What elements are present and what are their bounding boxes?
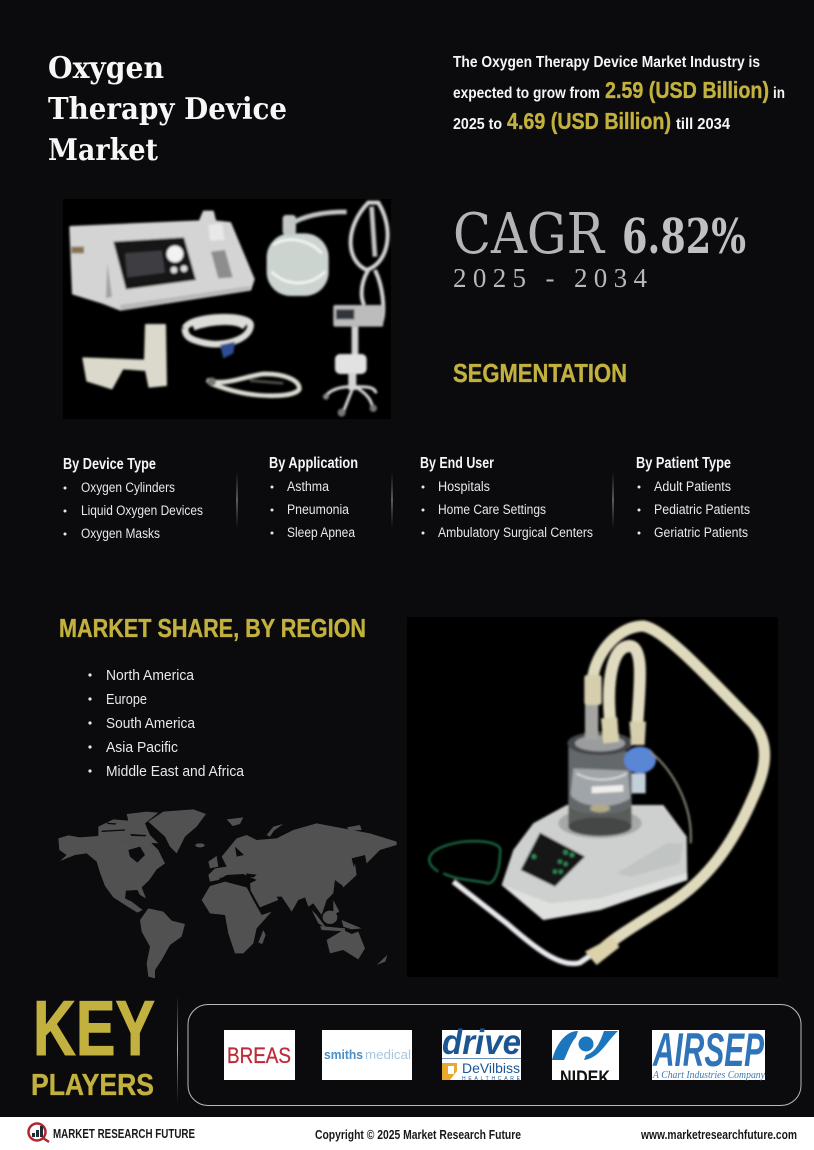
connectors — [585, 703, 598, 740]
logo: AirSep: A Chart Industries Company — [652, 1070, 765, 1081]
title — [48, 51, 287, 168]
CAGR figure: 6.82% — [622, 209, 746, 265]
world map — [58, 809, 397, 978]
product photo: humidifier — [407, 617, 778, 977]
segment: by patient type: By Patient Type — [636, 455, 731, 472]
region list: North America — [106, 667, 195, 684]
logo: Nidek — [552, 1030, 619, 1089]
footer — [0, 1117, 814, 1150]
segment: by end user: By End User — [420, 455, 494, 472]
humidifier chamber — [267, 233, 329, 296]
logo: Drive DeVilbiss: drive — [442, 1023, 521, 1062]
key players heading: PLAYERS — [31, 1067, 154, 1102]
logo: Smiths Medical: medical — [365, 1048, 411, 1062]
logo: Drive DeVilbiss — [442, 1023, 521, 1082]
segment: by device type: Liquid Oxygen Devices — [81, 503, 203, 518]
segment: by application: Asthma — [287, 479, 329, 494]
breathing circuit — [207, 374, 299, 396]
nebulizer — [624, 747, 656, 773]
logo: Drive DeVilbiss: HEALTHCARE — [462, 1076, 521, 1082]
segment: by patient type: Adult Patients — [654, 479, 731, 494]
icon: magnifier logo — [28, 1124, 49, 1142]
segment: by patient type: Pediatric Patients — [654, 502, 750, 517]
title: Oxygen — [48, 51, 164, 86]
key players panel — [188, 1004, 801, 1106]
market forecast text: 2025 to — [453, 116, 502, 133]
CAGR figure — [453, 202, 746, 293]
segment: by device type — [63, 456, 203, 541]
market share heading: MARKET SHARE, BY REGION — [59, 613, 366, 643]
segment: by end user: Ambulatory Surgical Centers — [438, 525, 593, 540]
segment: by end user: Home Care Settings — [438, 502, 546, 517]
segment: by device type: Oxygen Cylinders — [81, 480, 175, 495]
dark inland seas — [102, 823, 257, 885]
segment: by end user — [420, 455, 593, 540]
region list: Europe — [106, 691, 147, 708]
region list: Middle East and Africa — [106, 763, 245, 780]
market forecast text: in — [773, 85, 785, 102]
market forecast text: till 2034 — [676, 116, 730, 133]
key players heading — [31, 984, 155, 1102]
title: Market — [48, 133, 158, 168]
market forecast text: The Oxygen Therapy Device Market Industry is — [453, 54, 760, 71]
logo: Smiths Medical — [322, 1030, 412, 1080]
segmentation heading: SEGMENTATION — [453, 358, 627, 388]
segment: by patient type: Geriatric Patients — [654, 525, 748, 540]
T connector — [83, 325, 166, 388]
logo: Breas: BREAS — [227, 1043, 291, 1068]
main device body — [71, 212, 253, 309]
region list — [88, 667, 245, 780]
CAGR figure: CAGR — [453, 202, 606, 267]
logo: Drive DeVilbiss: DeVilbiss — [462, 1060, 520, 1076]
segment: by patient type — [636, 455, 750, 540]
logo: Nidek: NIDEK — [560, 1068, 610, 1089]
footer: MARKET RESEARCH FUTURE — [53, 1127, 195, 1141]
cannula — [429, 841, 500, 883]
logo: AirSep — [652, 1023, 765, 1081]
market forecast text: 4.69 (USD Billion) — [507, 108, 671, 134]
segment: by application — [269, 455, 358, 540]
segment: by application: Pneumonia — [287, 502, 349, 517]
market forecast text: expected to grow from — [453, 85, 600, 102]
title: Therapy Device — [48, 92, 287, 127]
market forecast text — [453, 54, 785, 134]
stand unit — [351, 203, 388, 322]
coiled hose — [185, 317, 251, 344]
segment: by application: Sleep Apnea — [287, 525, 355, 540]
market forecast text: 2.59 (USD Billion) — [605, 77, 769, 103]
segment: by device type: By Device Type — [63, 456, 156, 473]
tubes — [593, 626, 765, 948]
segment: by application: By Application — [269, 455, 358, 472]
key players heading: KEY — [33, 984, 155, 1072]
segment: by device type: Oxygen Masks — [81, 526, 160, 541]
product photo: oxygen therapy devices — [63, 199, 391, 419]
logo: Smiths Medical: smiths — [324, 1048, 363, 1062]
CAGR figure: 2025 - 2034 — [453, 263, 648, 293]
region list: Asia Pacific — [106, 739, 178, 756]
segment: by end user: Hospitals — [438, 479, 490, 494]
control panel — [521, 833, 585, 887]
footer: Copyright © 2025 Market Research Future — [315, 1128, 521, 1142]
region list: South America — [106, 715, 196, 732]
logo: Breas — [224, 1030, 295, 1080]
chamber — [558, 808, 642, 838]
base — [502, 805, 687, 920]
